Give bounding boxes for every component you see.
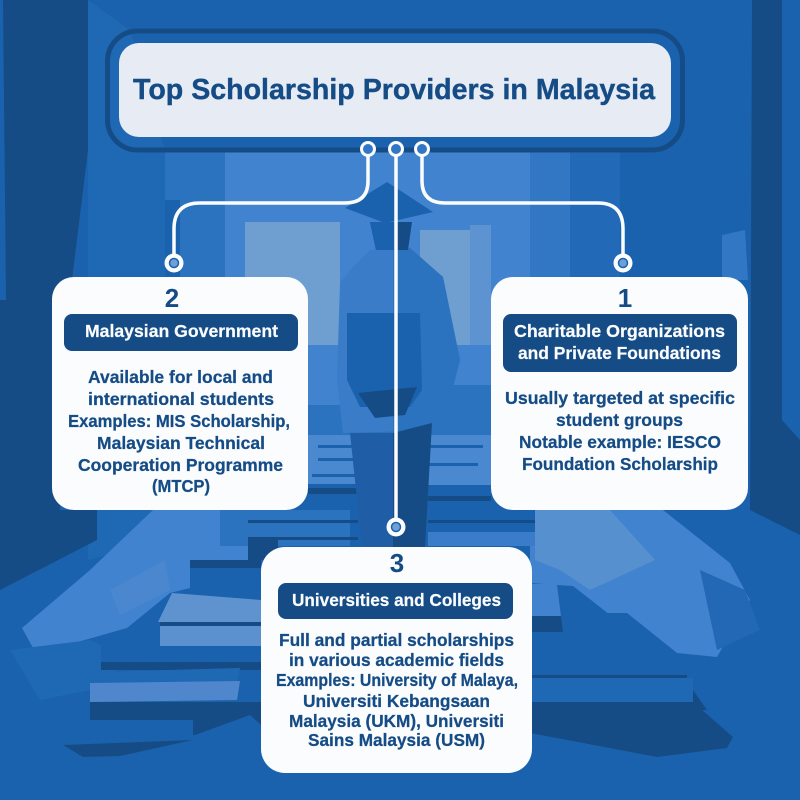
text block: university details: Sains Malaysia (USM) [308, 730, 485, 750]
number 3: 3 [390, 548, 404, 578]
title box [119, 43, 671, 137]
text block: charitable details: Usually targeted at specific [505, 388, 735, 408]
connector: title to card 3 [386, 142, 406, 536]
floor light left [22, 510, 248, 655]
number 1: 1 [618, 283, 632, 313]
connector: title to card 2 [164, 142, 374, 272]
heading bar: Malaysian Government: Malaysian Government [85, 321, 278, 341]
upper steps left [308, 435, 358, 510]
text block: government details: (MTCP) [152, 476, 210, 496]
text block: government details: Cooperation Programme [78, 455, 283, 475]
heading bar: Charitable Organizations: Charitable Organizations [514, 321, 725, 341]
title panel [108, 31, 682, 150]
panel: Charitable Organizations and Private Foundations [491, 277, 748, 510]
text block: university details: Full and partial scholarships [279, 630, 514, 650]
text block: government details: Malaysian Technical [97, 433, 265, 453]
number 2: 2 [165, 283, 179, 313]
text block: university details [276, 630, 518, 750]
books right of card 3 [428, 510, 733, 757]
heading bar: Universities and Colleges: Universities and Colleges [292, 590, 501, 610]
title outer ring [108, 31, 682, 150]
upper steps right [428, 435, 491, 510]
text block: university details: Examples: University of Malaya, [276, 670, 518, 690]
text block: charitable details: Foundation Scholarship [522, 454, 718, 474]
text block: university details: in various academic fields [289, 650, 504, 670]
text block: university details: Universiti Kebangsaan [303, 691, 490, 711]
heading bar: Malaysian Government [64, 314, 298, 351]
person [337, 182, 460, 547]
heading bar: Charitable Organizations [503, 314, 737, 372]
text block: university details: Malaysia (UKM), Universiti [289, 711, 504, 731]
panel: Universities and Colleges [261, 547, 532, 773]
books left of card 3 [63, 510, 358, 757]
title text: Top Scholarship Providers in Malaysia [133, 74, 656, 106]
windows [245, 222, 340, 345]
connector: title to card 1 [416, 142, 632, 272]
text block: government details [68, 367, 290, 496]
floor beyond stairs [308, 345, 491, 405]
text block: charitable details [505, 388, 735, 474]
text block: charitable details: Notable example: IESCO [519, 432, 721, 452]
floor light right [530, 510, 750, 657]
text block: government details: Available for local and [88, 367, 273, 387]
text block: government details: international students [88, 389, 274, 409]
panel: Malaysian Government [52, 277, 308, 510]
hallway walls [88, 0, 165, 560]
heading bar: Charitable Organizations: and Private Foundations [518, 343, 721, 363]
text block: government details: Examples: MIS Scholarship, [68, 411, 290, 431]
text block: charitable details: student groups [556, 410, 683, 430]
heading bar: Universities and Colleges [278, 583, 513, 619]
